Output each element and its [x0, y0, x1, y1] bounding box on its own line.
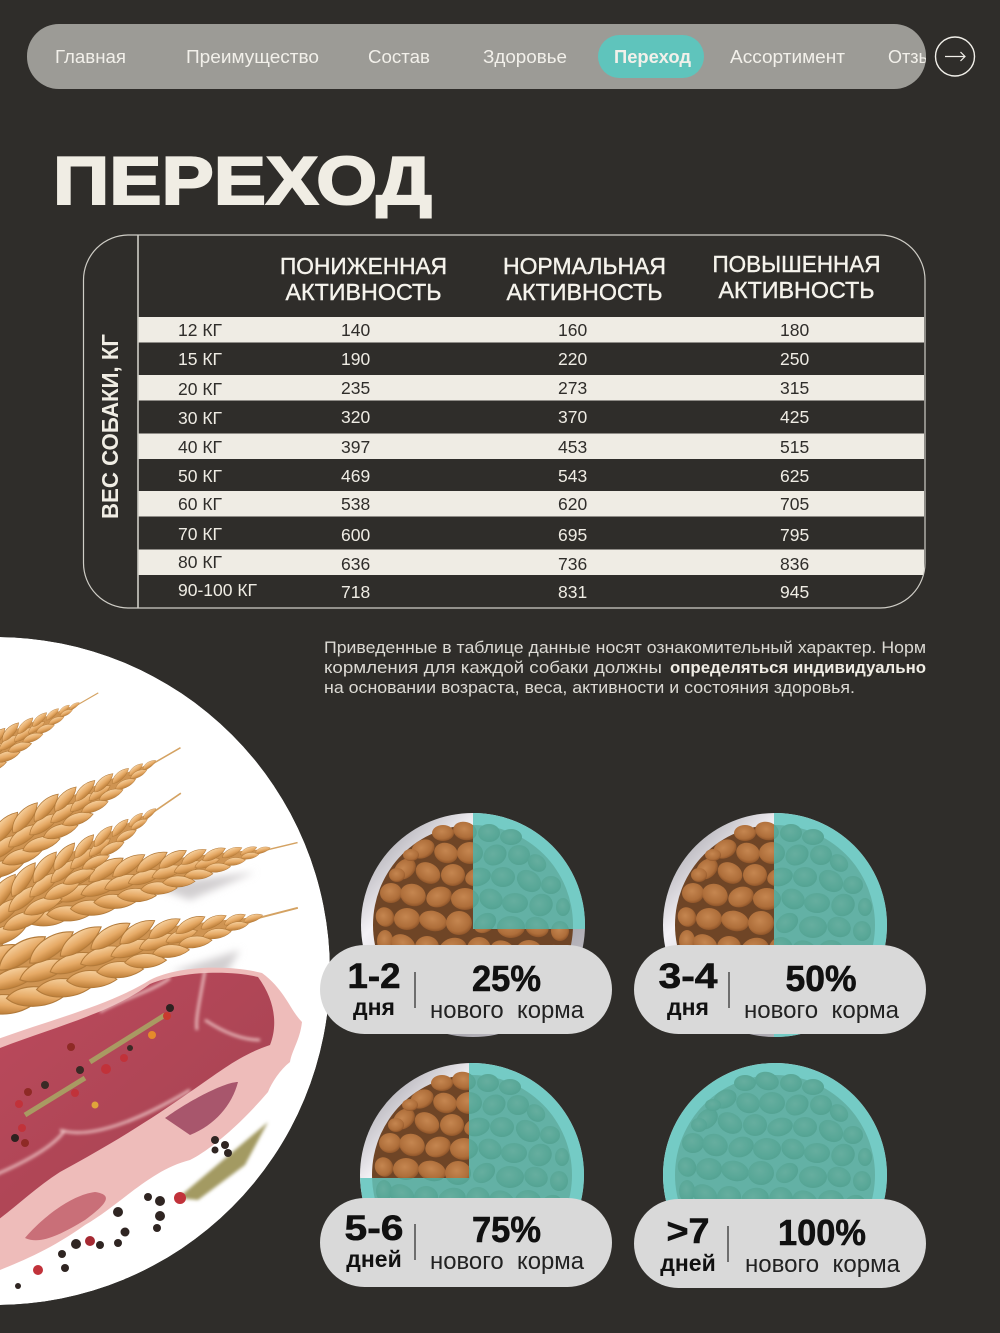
- label pill: 5-6: [344, 1209, 404, 1248]
- table rows: 736: [558, 554, 587, 574]
- label pill: дня: [667, 994, 709, 1020]
- table rows: 15 КГ: [178, 349, 223, 369]
- ingredient photo circle: [0, 637, 330, 1305]
- icon: next arrow button: [936, 37, 974, 76]
- nav items: [56, 50, 926, 67]
- step over 7 days: [634, 1063, 926, 1288]
- column headers: АКТИВНОСТЬ: [286, 279, 442, 305]
- feeding table: [84, 235, 925, 608]
- table frame: [84, 235, 925, 608]
- table rows: 235: [341, 378, 370, 398]
- label pill: 50%: [786, 958, 856, 999]
- nav items: Ассортимент: [730, 47, 845, 67]
- table rows: 453: [558, 437, 587, 457]
- label pill: 75%: [472, 1209, 541, 1250]
- spices below steak: [15, 1122, 268, 1289]
- label pill: нового корма: [430, 997, 585, 1024]
- table rows: 160: [558, 320, 587, 340]
- table rows: 625: [780, 466, 809, 486]
- table rows: 70 КГ: [178, 524, 223, 544]
- table rows: 90-100 КГ: [178, 580, 258, 600]
- label pill: нового корма: [745, 1251, 901, 1278]
- nav items: Переход: [614, 47, 692, 67]
- wheat ears: [0, 692, 298, 1015]
- label pill: дней: [346, 1246, 402, 1272]
- column headers: [280, 251, 880, 305]
- label pill: нового корма: [744, 997, 900, 1024]
- disclaimer text: [324, 639, 926, 697]
- table rows: 60 КГ: [178, 494, 223, 514]
- table rows: 20 КГ: [178, 379, 223, 399]
- bowl 100 percent: [663, 1063, 887, 1287]
- table rows: 636: [341, 554, 370, 574]
- active nav pill: [598, 35, 704, 78]
- label pill: дней: [660, 1250, 716, 1276]
- table rows: 273: [558, 378, 587, 398]
- table rows: 718: [341, 582, 370, 602]
- label pill: 1-2: [348, 957, 400, 996]
- label pill: [320, 945, 612, 1034]
- table rows: 40 КГ: [178, 437, 223, 457]
- table rows: 30 КГ: [178, 408, 223, 428]
- step 3-4 days: [634, 813, 926, 1037]
- bowl 75 percent: [360, 1063, 584, 1200]
- fat marbling: [0, 970, 260, 1175]
- table rows: 705: [780, 494, 809, 514]
- label pill: 3-4: [658, 957, 718, 996]
- table rows: 320: [341, 407, 370, 427]
- table rows: 620: [558, 494, 587, 514]
- table rows: 836: [780, 554, 809, 574]
- nav items: Состав: [368, 47, 430, 67]
- table rows: 370: [558, 407, 587, 427]
- disclaimer text: Приведенные в таблице данные носят ознакомительный характер. Норм: [324, 639, 926, 657]
- title: ПЕРЕХОД: [53, 143, 432, 219]
- raw beef steak: [0, 968, 302, 1289]
- table rows: 831: [558, 582, 587, 602]
- nav items: Отзывы: [888, 47, 954, 67]
- table rows: 515: [780, 437, 809, 457]
- table rows: 600: [341, 525, 370, 545]
- label pill: [634, 1199, 926, 1288]
- table rows: 180: [780, 320, 809, 340]
- nav items: Преимущество: [186, 47, 319, 67]
- table rows: 250: [780, 349, 809, 369]
- table rows: 140: [341, 320, 370, 340]
- peppercorns on steak: [11, 1004, 174, 1147]
- nav items: Главная: [55, 47, 126, 67]
- step 1-2 days: [320, 813, 612, 1037]
- table row bands: [138, 317, 924, 575]
- disclaimer text: кормления для каждой собаки должны: [324, 659, 662, 677]
- navigation bar: [27, 24, 954, 89]
- column headers: ПОВЫШЕННАЯ: [712, 251, 880, 277]
- table rows: 695: [558, 525, 587, 545]
- bowl 50 percent: [663, 813, 887, 1037]
- column headers: АКТИВНОСТЬ: [718, 277, 874, 303]
- table rows: 190: [341, 349, 370, 369]
- column headers: НОРМАЛЬНАЯ: [503, 253, 666, 279]
- table rows: 945: [780, 582, 809, 602]
- vertical axis label: ВЕС СОБАКИ, КГ: [97, 334, 123, 519]
- table rows: 469: [341, 466, 370, 486]
- table rows: [178, 320, 809, 602]
- disclaimer text: на основании возраста, веса, активности и состояния здоровья.: [324, 679, 855, 697]
- table rows: 397: [341, 437, 370, 457]
- table rows: 50 КГ: [178, 466, 223, 486]
- label pill: дня: [353, 994, 395, 1020]
- bowl 25 percent: [361, 813, 585, 1037]
- column headers: АКТИВНОСТЬ: [506, 279, 662, 305]
- table rows: 538: [341, 494, 370, 514]
- label pill: нового корма: [430, 1248, 585, 1275]
- disclaimer text: определяться индивидуально: [670, 659, 926, 677]
- soft shadows under wheat: [164, 870, 250, 972]
- label pill: 100%: [778, 1212, 866, 1253]
- table rows: 12 КГ: [178, 320, 223, 340]
- table rows: 543: [558, 466, 587, 486]
- label pill: 25%: [472, 958, 541, 999]
- table rows: 425: [780, 407, 809, 427]
- nav items: Здоровье: [483, 47, 567, 67]
- table rows: 795: [780, 525, 809, 545]
- table rows: 220: [558, 349, 587, 369]
- label pill: [320, 1198, 612, 1287]
- label pill: >7: [666, 1212, 710, 1251]
- table rows: 80 КГ: [178, 552, 223, 572]
- label pill: [634, 945, 926, 1034]
- step 5-6 days: [320, 1063, 612, 1287]
- table rows: 315: [780, 378, 809, 398]
- column headers: ПОНИЖЕННАЯ: [280, 253, 447, 279]
